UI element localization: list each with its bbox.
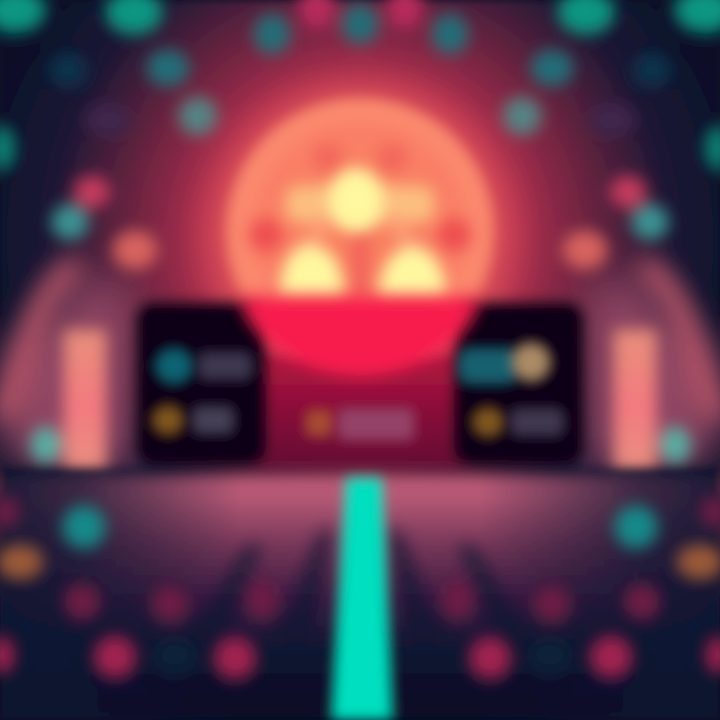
- dim red floor nodes: [0, 496, 720, 622]
- sun yellow nodes: [280, 168, 446, 298]
- teal corner nodes: [0, 0, 720, 34]
- left card: [136, 302, 266, 465]
- salmon side columns: [31, 330, 690, 470]
- sun disc: [226, 98, 494, 366]
- center panel label bar: [338, 408, 414, 440]
- side light haze: [0, 270, 720, 470]
- red floor nodes: [0, 636, 720, 679]
- top node pattern: [0, 0, 720, 269]
- dark teal floor nodes: [153, 637, 197, 673]
- side red and teal nodes: [74, 176, 110, 208]
- glowing sun: [214, 89, 506, 381]
- left card bar: [198, 352, 252, 380]
- left floor fade: [0, 466, 240, 720]
- floor node pattern: [0, 496, 720, 679]
- perspective floor: [0, 466, 720, 720]
- muted inner nodes: [179, 97, 541, 135]
- left card lower bar: [192, 406, 234, 434]
- sun inner network: [249, 143, 471, 295]
- central teal strip: [332, 478, 392, 720]
- sun halo: [214, 89, 506, 381]
- left card teal chip: [155, 348, 193, 384]
- floor perspective lines: [190, 530, 530, 640]
- right card teal bar: [458, 348, 518, 384]
- orange floor nodes: [0, 545, 43, 579]
- center panel orange chip: [306, 410, 332, 436]
- right card lower bar: [510, 408, 564, 436]
- right card orange chip: [472, 407, 504, 437]
- side light streams: [5, 270, 715, 410]
- right card: [454, 302, 584, 465]
- crimson base band: [240, 296, 480, 376]
- right floor fade: [480, 466, 720, 720]
- red top nodes: [299, 0, 423, 29]
- teal floor nodes: [63, 506, 105, 548]
- faint outer nodes: [48, 52, 672, 88]
- right card tan node: [512, 343, 550, 381]
- central panel: [250, 355, 470, 467]
- left card orange chip: [152, 405, 184, 435]
- teal arc nodes: [147, 4, 573, 86]
